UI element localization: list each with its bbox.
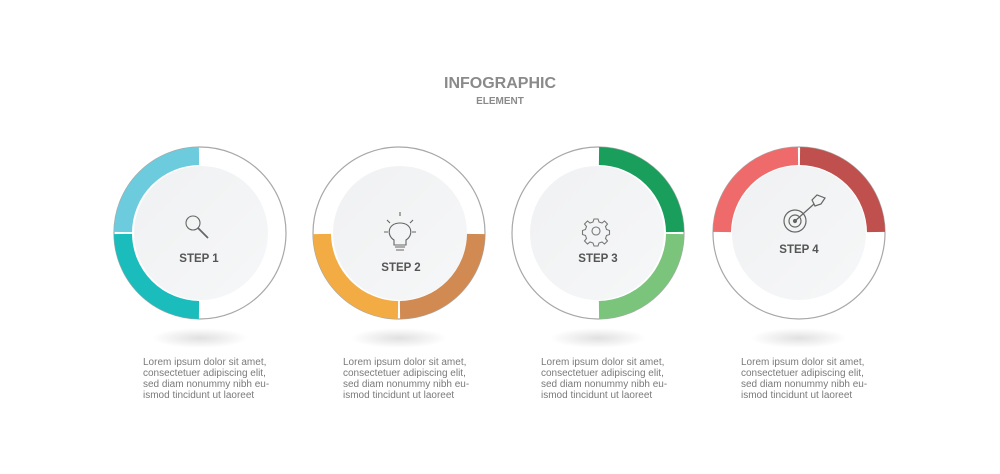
text: step 4: consectetuer adipiscing elit, xyxy=(741,368,864,379)
step 2 xyxy=(313,147,485,348)
step 1 xyxy=(114,147,286,348)
text: step 2 xyxy=(343,357,469,401)
label: step 4: STEP 4 xyxy=(779,244,819,256)
text: step 3 xyxy=(541,357,667,401)
text: step 2: ismod tincidunt ut laoreet xyxy=(343,390,454,401)
text: step 4: ismod tincidunt ut laoreet xyxy=(741,390,852,401)
text: step 3: sed diam nonummy nibh eu- xyxy=(541,379,667,390)
icon: gear xyxy=(582,219,610,246)
text: step 1: consectetuer adipiscing elit, xyxy=(143,368,266,379)
text: step 2: sed diam nonummy nibh eu- xyxy=(343,379,469,390)
icon: light bulb xyxy=(384,212,416,250)
text: step 4: sed diam nonummy nibh eu- xyxy=(741,379,867,390)
text: step 3: consectetuer adipiscing elit, xyxy=(541,368,664,379)
step 3 xyxy=(512,147,684,348)
title: INFOGRAPHIC xyxy=(444,75,556,92)
text: step 2: Lorem ipsum dolor sit amet, xyxy=(343,357,466,368)
label: step 2: STEP 2 xyxy=(381,262,421,274)
label: step 1: STEP 1 xyxy=(179,253,219,265)
icon: magnifier xyxy=(186,216,208,238)
icon: target xyxy=(784,195,825,232)
text: step 1 xyxy=(143,357,269,401)
label: step 3: STEP 3 xyxy=(578,253,618,265)
subtitle: ELEMENT xyxy=(476,96,524,107)
text: step 1: sed diam nonummy nibh eu- xyxy=(143,379,269,390)
text: step 1: Lorem ipsum dolor sit amet, xyxy=(143,357,266,368)
text: step 3: Lorem ipsum dolor sit amet, xyxy=(541,357,664,368)
text: step 4 xyxy=(741,357,867,401)
text: step 1: ismod tincidunt ut laoreet xyxy=(143,390,254,401)
text: step 3: ismod tincidunt ut laoreet xyxy=(541,390,652,401)
text: step 2: consectetuer adipiscing elit, xyxy=(343,368,466,379)
text: step 4: Lorem ipsum dolor sit amet, xyxy=(741,357,864,368)
step 4 xyxy=(713,147,885,348)
